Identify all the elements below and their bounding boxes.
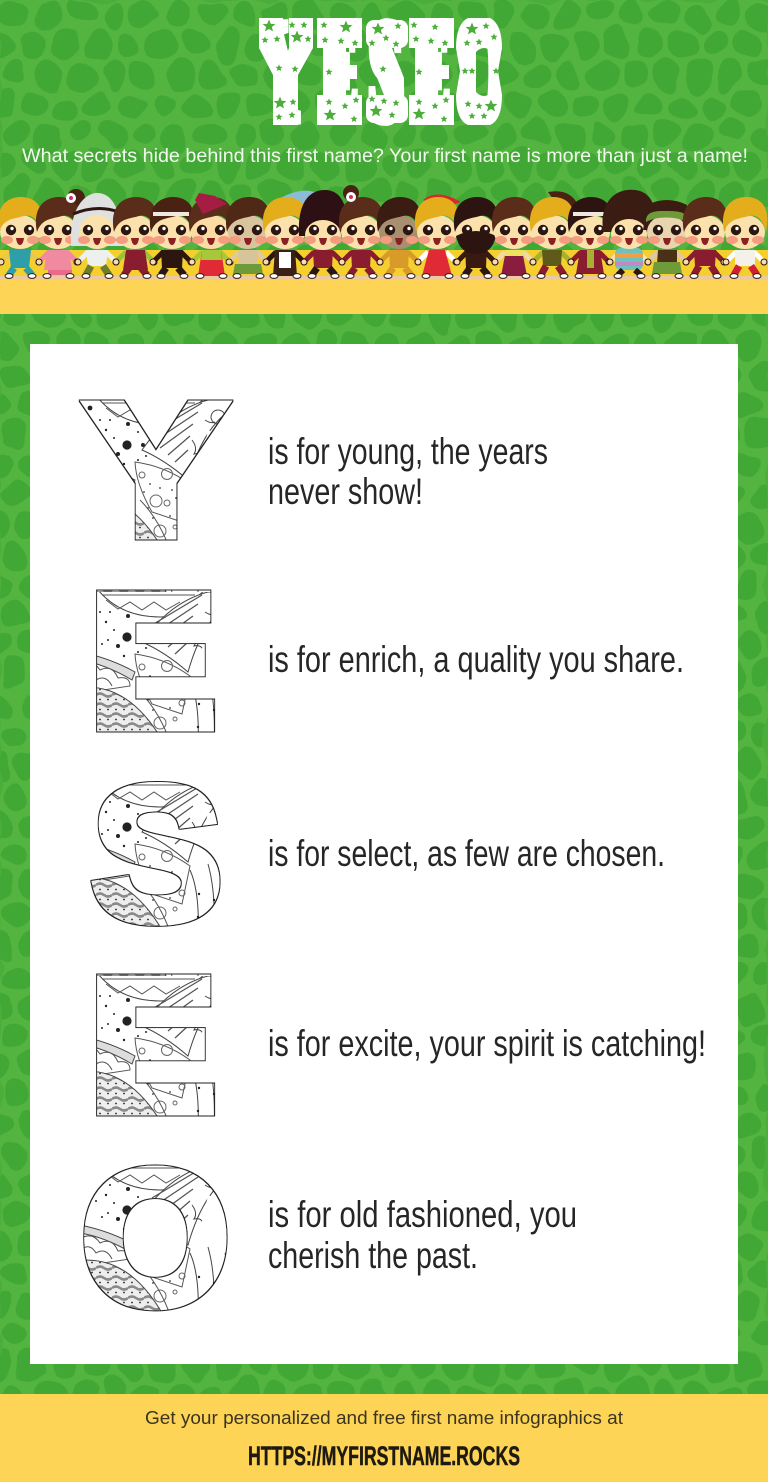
child 4 [113, 197, 157, 278]
row: O [82, 1133, 577, 1344]
text O: cherish the past. [268, 1235, 478, 1276]
footer band [0, 1394, 768, 1482]
row: Y [85, 365, 548, 576]
child 16 [568, 197, 612, 278]
child 7 [226, 197, 270, 278]
subtitle: What secrets hide behind this first name? Your first name is more than just a name! [22, 145, 748, 167]
panel: white card [30, 344, 738, 1364]
child 20 [723, 197, 767, 278]
child 2 [36, 189, 85, 278]
child 1 [0, 197, 42, 278]
title stars [261, 20, 500, 122]
banner band [0, 280, 768, 314]
child 5 [150, 197, 194, 278]
child 3 [71, 193, 123, 278]
footer [0, 1394, 768, 1482]
child 13 [454, 197, 498, 278]
row: E second [90, 940, 706, 1151]
title slabs [259, 18, 502, 125]
footer line: Get your personalized and free first name infographics at [145, 1408, 623, 1428]
text O: is for old fashioned, you [268, 1194, 577, 1235]
child 6 [189, 193, 233, 278]
yellow banner with children [0, 185, 768, 314]
child 15 [530, 191, 578, 278]
child 9 [299, 190, 347, 278]
child 10 [339, 185, 383, 278]
child 8 [263, 191, 315, 278]
title: YESEO [259, 0, 502, 152]
text Y: never show! [268, 471, 423, 512]
letter Y: Y [85, 365, 227, 576]
letter S: S [92, 749, 222, 960]
child 12 [415, 194, 461, 278]
row: E [90, 556, 684, 767]
row: S [92, 749, 665, 960]
footer url: HTTPS://MYFIRSTNAME.ROCKS [248, 1441, 520, 1471]
child 19 [683, 197, 727, 278]
text Y: is for young, the years [268, 431, 548, 472]
child 17 [603, 190, 654, 278]
title letters [264, 0, 500, 152]
child 11 [377, 197, 421, 278]
letter E: E [90, 556, 216, 767]
child 18 [643, 200, 689, 278]
letter E second: E [90, 940, 216, 1151]
child 14 [492, 197, 536, 278]
letter O: O [82, 1133, 229, 1344]
